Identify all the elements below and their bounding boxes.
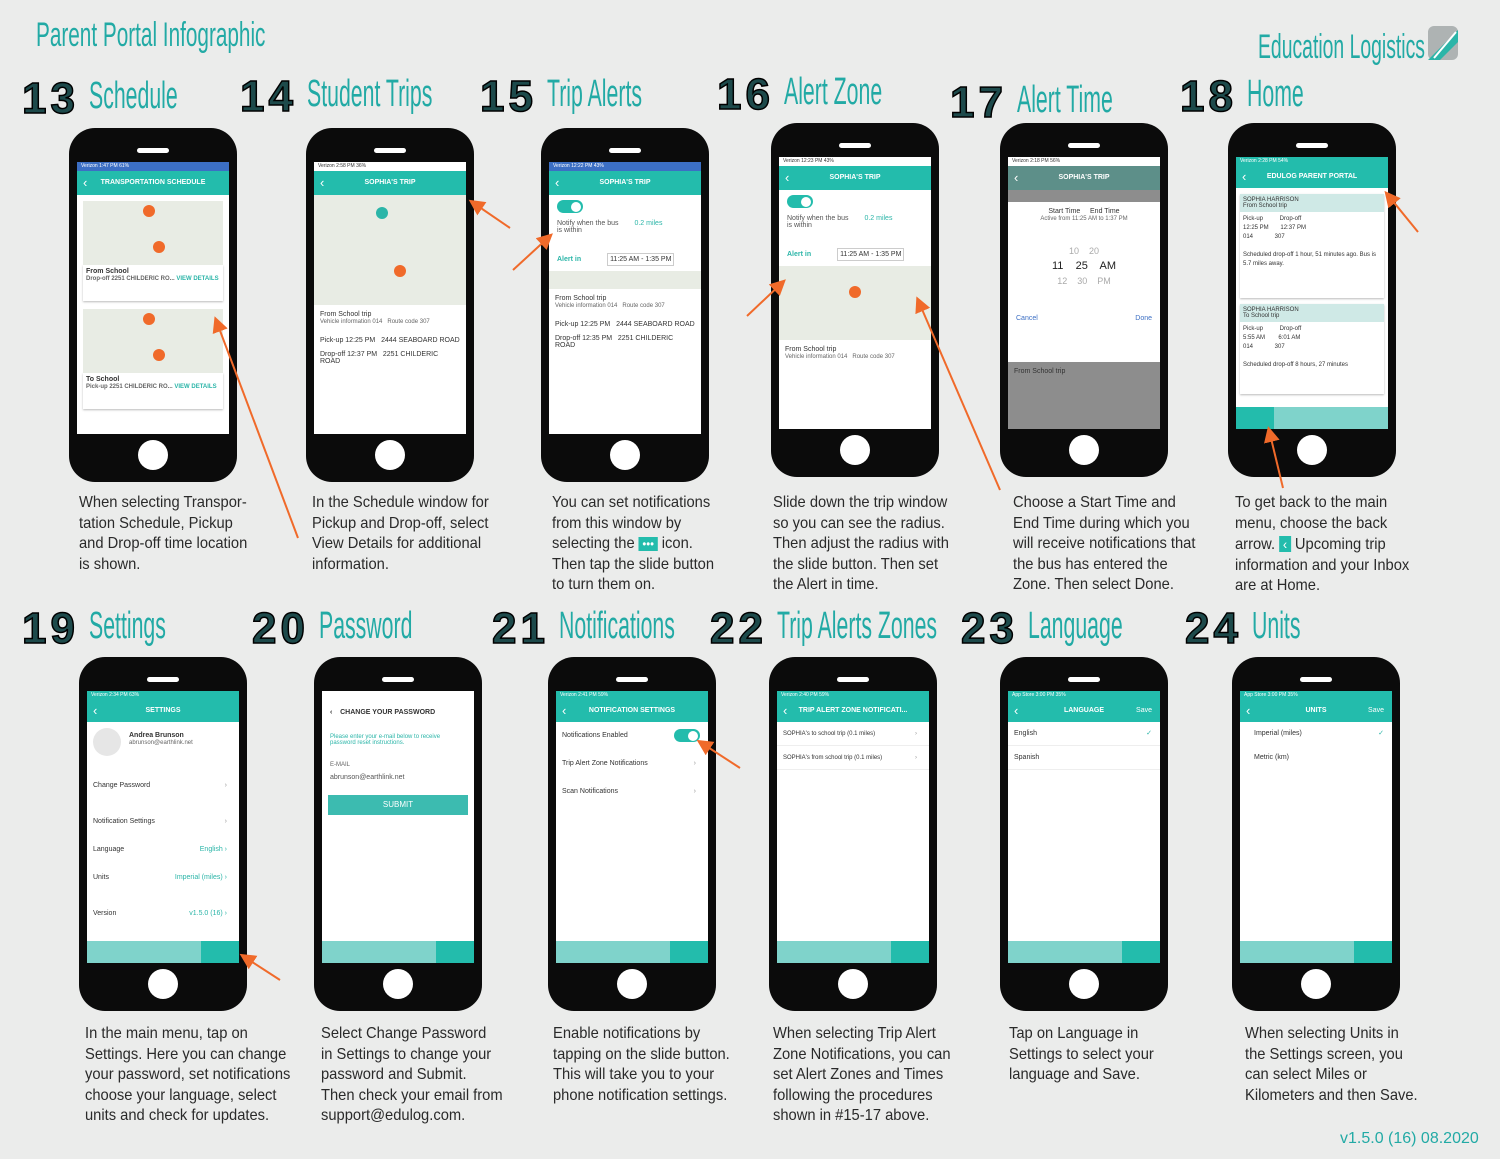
phone 20: ‹ CHANGE YOUR PASSWORD xyxy=(330,709,435,716)
phone 17: Cancel xyxy=(1016,315,1038,322)
heading 20: Password xyxy=(319,605,412,647)
phone 18: 014 307 xyxy=(1243,234,1285,240)
heading 17: 17 xyxy=(950,78,1007,127)
phone 19: Imperial (miles) › xyxy=(175,874,227,881)
phone 17: 11 25 AM xyxy=(1052,260,1116,272)
phone 15: Alert in 11:25 AM - 1:35 PM xyxy=(557,256,671,263)
text 20 xyxy=(321,1025,503,1124)
heading 19: 19 xyxy=(22,604,79,653)
text 15: to turn them on. xyxy=(552,576,655,593)
heading 22: 22 xyxy=(710,604,767,653)
phone 13: Drop-off 2251 CHILDERIC RO... VIEW DETAILS xyxy=(86,276,219,282)
heading 20 xyxy=(252,604,412,653)
phone 19: Change Password xyxy=(93,782,150,789)
text 18 xyxy=(1235,494,1409,594)
text 13: and Drop-off time location xyxy=(79,535,247,552)
heading 13 xyxy=(22,74,178,123)
text 17: the bus has entered the xyxy=(1013,556,1168,573)
phone 13: Verizon 1:47 PM 61% xyxy=(81,163,129,169)
phone 16: Notify when the bus 0.2 miles xyxy=(787,215,892,222)
phone 20: SUBMIT xyxy=(383,800,413,809)
phone 21: › xyxy=(694,788,696,795)
text 20: support@edulog.com. xyxy=(321,1107,465,1124)
phone 20 xyxy=(314,657,482,1011)
phone 16: From School trip xyxy=(785,346,836,353)
phone 22 xyxy=(769,657,937,1011)
text 16: so you can see the radius. xyxy=(773,515,945,532)
phone 23: App Store 3:00 PM 35% xyxy=(1012,692,1066,698)
text 13 xyxy=(79,494,247,573)
text 17: End Time during which you xyxy=(1013,515,1190,532)
phone 14: Drop-off 12:37 PM 2251 CHILDERIC ROAD xyxy=(320,351,438,365)
text 20: password and Submit. xyxy=(321,1066,467,1083)
heading 14: Student Trips xyxy=(307,73,432,115)
phone 17: Start Time End Time xyxy=(1048,208,1120,215)
text 21 xyxy=(553,1025,730,1104)
phone 24: UNITS xyxy=(1306,707,1326,714)
heading 24 xyxy=(1185,604,1300,653)
text 13: is shown. xyxy=(79,556,140,573)
text 18: arrow. ‹ Upcoming trip xyxy=(1235,536,1386,553)
phone 19: v1.5.0 (16) › xyxy=(189,910,227,917)
phone 20: E-MAIL xyxy=(330,762,350,768)
text 24: When selecting Units in xyxy=(1245,1025,1399,1042)
phone 16: SOPHIA'S TRIP xyxy=(829,174,881,181)
text 22: following the procedures xyxy=(773,1087,933,1104)
text 21: Enable notifications by xyxy=(553,1025,700,1042)
text 24: Kilometers and then Save. xyxy=(1245,1087,1418,1104)
phone 18: To School trip xyxy=(1243,313,1279,319)
heading 23: Language xyxy=(1028,605,1123,647)
heading 24: Units xyxy=(1252,605,1300,647)
phone 15: Drop-off 12:35 PM 2251 CHILDERIC ROAD xyxy=(555,335,673,349)
phone 15: is within xyxy=(557,227,582,234)
text 18: To get back to the main xyxy=(1235,494,1387,511)
heading 14: 14 xyxy=(240,72,297,121)
phone 15: Pick-up 12:25 PM 2444 SEABOARD ROAD xyxy=(555,321,695,328)
phone 23 xyxy=(1000,657,1168,1011)
phone 18: Verizon 2:28 PM 54% xyxy=(1240,158,1288,164)
phone 14: From School trip xyxy=(320,311,371,318)
phone 19: Version xyxy=(93,910,116,917)
phone 24: ✓ xyxy=(1378,730,1384,737)
phone 15: SOPHIA'S TRIP xyxy=(599,179,651,186)
phone 15: Notify when the bus 0.2 miles xyxy=(557,220,662,227)
text 18: are at Home. xyxy=(1235,577,1320,594)
text 24: the Settings screen, you xyxy=(1245,1046,1403,1063)
phone 17: 10 20 xyxy=(1069,246,1099,256)
text 21: This will take you to your xyxy=(553,1066,714,1083)
text 22: Zone Notifications, you can xyxy=(773,1046,951,1063)
text 19: units and check for updates. xyxy=(85,1107,269,1124)
heading 17: Alert Time xyxy=(1017,79,1113,121)
phone 22: SOPHIA's to school trip (0.1 miles) xyxy=(783,731,875,737)
phone 13: TRANSPORTATION SCHEDULE xyxy=(101,179,205,186)
heading 17 xyxy=(950,78,1113,127)
phone 19: Language xyxy=(93,846,124,853)
phone 22: › xyxy=(915,731,917,737)
text 16: Then adjust the radius with xyxy=(773,535,949,552)
heading 13: Schedule xyxy=(89,75,178,117)
text 19: In the main menu, tap on xyxy=(85,1025,248,1042)
heading 21: Notifications xyxy=(559,605,675,647)
phone 21: Trip Alert Zone Notifications xyxy=(562,760,648,767)
phone 14 xyxy=(306,128,474,482)
text 23 xyxy=(1009,1025,1154,1083)
phone 22: TRIP ALERT ZONE NOTIFICATI... xyxy=(799,707,907,714)
phone 18: SOPHIA HARRISON xyxy=(1243,307,1299,313)
heading 16: 16 xyxy=(717,70,774,119)
phone 21: Verizon 2:41 PM 59% xyxy=(560,692,608,698)
text 20: Then check your email from xyxy=(321,1087,503,1104)
text 19 xyxy=(85,1025,290,1124)
phone 23: Spanish xyxy=(1014,754,1039,761)
phone 21: Notifications Enabled xyxy=(562,732,628,739)
phone 21: › xyxy=(694,760,696,767)
phone 18: From School trip xyxy=(1243,203,1287,209)
phone 17: SOPHIA'S TRIP xyxy=(1058,174,1110,181)
text 16: the slide button. Then set xyxy=(773,556,938,573)
text 16: the Alert in time. xyxy=(773,576,879,593)
phone 19: Notification Settings xyxy=(93,818,155,825)
heading 16: Alert Zone xyxy=(784,71,882,113)
text 15: from this window by xyxy=(552,515,681,532)
text 22: shown in #15-17 above. xyxy=(773,1107,929,1124)
heading 18 xyxy=(1180,72,1304,121)
text 23: language and Save. xyxy=(1009,1066,1140,1083)
title: Parent Portal Infographic xyxy=(36,16,265,54)
text 18: information and your Inbox xyxy=(1235,557,1409,574)
phone 15: Verizon 12:22 PM 43% xyxy=(553,163,604,169)
phone 22: SOPHIA's from school trip (0.1 miles) xyxy=(783,755,882,761)
text 18: menu, choose the back xyxy=(1235,515,1387,532)
phone 15: Vehicle information 014 Route code 307 xyxy=(555,303,665,309)
text 14: Pickup and Drop-off, select xyxy=(312,515,488,532)
phone 18: SOPHIA HARRISON xyxy=(1243,197,1299,203)
phone 13 xyxy=(69,128,237,482)
phone 18: Scheduled drop-off 1 hour, 51 minutes ago. Bus is 5.7 miles away. xyxy=(1243,252,1376,267)
heading 21 xyxy=(492,604,675,653)
phone 21: Scan Notifications xyxy=(562,788,618,795)
text 15: You can set notifications xyxy=(552,494,710,511)
phone 14: Pick-up 12:25 PM 2444 SEABOARD ROAD xyxy=(320,337,460,344)
phone 14: Vehicle information 014 Route code 307 xyxy=(320,319,430,325)
phone 21 xyxy=(548,657,716,1011)
text 17: Choose a Start Time and xyxy=(1013,494,1176,511)
phone 19 xyxy=(79,657,247,1011)
heading 22 xyxy=(710,604,937,653)
heading 16 xyxy=(717,70,882,119)
phone 24: Save xyxy=(1368,707,1384,714)
text 16 xyxy=(773,494,949,593)
phone 16 xyxy=(771,123,939,477)
icon: logo xyxy=(1428,26,1458,60)
text 14: In the Schedule window for xyxy=(312,494,489,511)
phone 19: › xyxy=(225,818,227,825)
text 15: Then tap the slide button xyxy=(552,556,714,573)
phone 18: 12:25 PM 12:37 PM xyxy=(1243,225,1306,231)
phone 18: Pick-up Drop-off xyxy=(1243,216,1301,222)
phone 19: › xyxy=(225,782,227,789)
heading 20: 20 xyxy=(252,604,309,653)
text 22 xyxy=(773,1025,951,1124)
phone 19: abrunson@earthlink.net xyxy=(129,740,193,746)
phone 24 xyxy=(1232,657,1400,1011)
phone 17: Done xyxy=(1135,315,1152,322)
phone 24: App Store 3:00 PM 35% xyxy=(1244,692,1298,698)
phone 22: › xyxy=(915,755,917,761)
phone 20: abrunson@earthlink.net xyxy=(330,774,404,781)
text 23: Tap on Language in xyxy=(1009,1025,1138,1042)
text 13: When selecting Transpor- xyxy=(79,494,247,511)
text 14: View Details for additional xyxy=(312,535,481,552)
phone 19: Units xyxy=(93,874,109,881)
text 19: choose your language, select xyxy=(85,1087,276,1104)
text 23: Settings to select your xyxy=(1009,1046,1154,1063)
heading 23 xyxy=(961,604,1123,653)
phone 18: Pick-up Drop-off xyxy=(1243,326,1301,332)
brand: Education Logistics: Education Logistics xyxy=(1258,28,1425,66)
heading 21: 21 xyxy=(492,604,549,653)
text 15: selecting the ••• icon. xyxy=(552,535,693,552)
heading 14 xyxy=(240,72,432,121)
phone 23: LANGUAGE xyxy=(1064,707,1104,714)
phone 15: From School trip xyxy=(555,295,606,302)
phone 24: Imperial (miles) xyxy=(1254,730,1302,737)
heading 24: 24 xyxy=(1185,604,1242,653)
heading 23: 23 xyxy=(961,604,1018,653)
phone 19: Andrea Brunson xyxy=(129,732,184,739)
text 24: can select Miles or xyxy=(1245,1066,1367,1083)
phone 18: 5:55 AM 6:01 AM xyxy=(1243,335,1300,341)
phone 16: Verizon 12:23 PM 43% xyxy=(783,158,834,164)
phone 14: SOPHIA'S TRIP xyxy=(364,179,416,186)
phone 21: NOTIFICATION SETTINGS xyxy=(589,707,675,714)
phone 24: Metric (km) xyxy=(1254,754,1289,761)
version: v1.5.0 (16) 08.2020 xyxy=(1340,1130,1479,1147)
text 21: tapping on the slide button. xyxy=(553,1046,730,1063)
phone 17 xyxy=(1000,123,1168,477)
phone 18 xyxy=(1228,123,1396,477)
heading 19: Settings xyxy=(89,605,166,647)
phone 23: English xyxy=(1014,730,1037,737)
heading 19 xyxy=(22,604,166,653)
heading 22: Trip Alerts Zones xyxy=(777,605,937,647)
phone 18: Scheduled drop-off 8 hours, 27 minutes xyxy=(1243,362,1348,368)
heading 18: 18 xyxy=(1180,72,1237,121)
heading 15: 15 xyxy=(480,72,537,121)
phone 18: 014 307 xyxy=(1243,344,1285,350)
text 19: Settings. Here you can change xyxy=(85,1046,286,1063)
phone 17: 12 30 PM xyxy=(1057,276,1111,286)
text 19: your password, set notifications xyxy=(85,1066,290,1083)
text 22: When selecting Trip Alert xyxy=(773,1025,936,1042)
text 17: will receive notifications that xyxy=(1013,535,1195,552)
text 20: in Settings to change your xyxy=(321,1046,491,1063)
text 21: phone notification settings. xyxy=(553,1087,727,1104)
phone 16: is within xyxy=(787,222,812,229)
phone 19: SETTINGS xyxy=(145,707,180,714)
text 15 xyxy=(552,494,714,593)
phone 15 xyxy=(541,128,709,482)
phone 23: ✓ xyxy=(1146,730,1152,737)
phone 20: Please enter your e-mail below to receive password reset instructions. xyxy=(330,734,440,746)
phone 17: From School trip xyxy=(1014,368,1065,375)
heading 15: Trip Alerts xyxy=(547,73,642,115)
phone 13: Pick-up 2251 CHILDERIC RO... VIEW DETAILS xyxy=(86,384,217,390)
text 24 xyxy=(1245,1025,1418,1104)
phone 18: EDULOG PARENT PORTAL xyxy=(1267,173,1357,180)
phone 13: From School xyxy=(86,268,129,275)
text 17: Zone. Then select Done. xyxy=(1013,576,1174,593)
phone 17: Verizon 2:18 PM 56% xyxy=(1012,158,1060,164)
phone 17: Active from 11:25 AM to 1:37 PM xyxy=(1040,216,1128,222)
heading 13: 13 xyxy=(22,74,79,123)
text 17 xyxy=(1013,494,1196,593)
phone 16: Vehicle information 014 Route code 307 xyxy=(785,354,895,360)
phone 22: Verizon 2:40 PM 59% xyxy=(781,692,829,698)
phone 13: To School xyxy=(86,376,119,383)
phone 23: Save xyxy=(1136,707,1152,714)
text 20: Select Change Password xyxy=(321,1025,486,1042)
text 22: set Alert Zones and Times xyxy=(773,1066,943,1083)
text 13: tation Schedule, Pickup xyxy=(79,515,233,532)
phone 19: Verizon 2:34 PM 63% xyxy=(91,692,139,698)
text 16: Slide down the trip window xyxy=(773,494,947,511)
heading 18: Home xyxy=(1247,73,1304,115)
phone 19: English › xyxy=(200,846,227,853)
phone 16: Alert in 11:25 AM - 1:35 PM xyxy=(787,251,901,258)
text 14: information. xyxy=(312,556,389,573)
phone 14: Verizon 2:58 PM 36% xyxy=(318,163,366,169)
heading 15 xyxy=(480,72,642,121)
text 14 xyxy=(312,494,489,573)
